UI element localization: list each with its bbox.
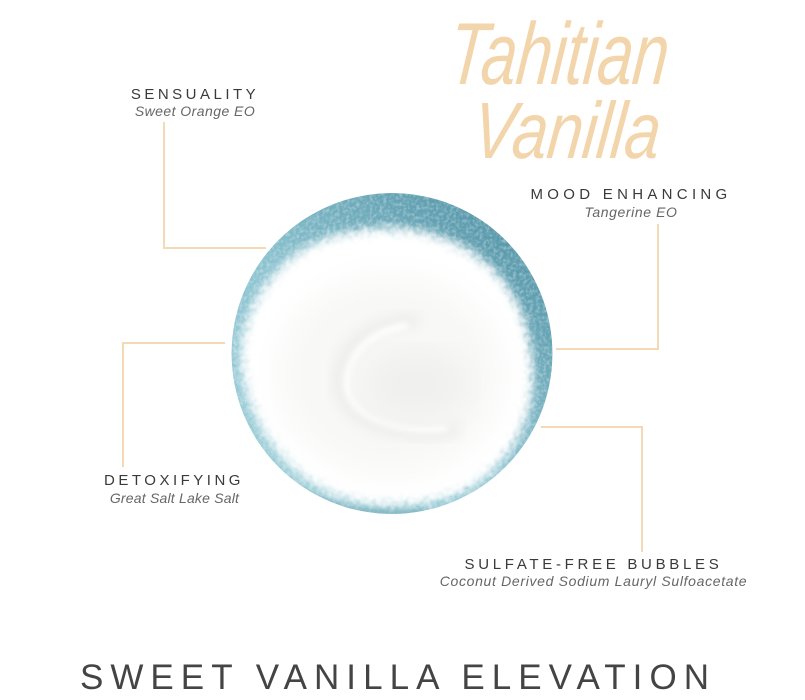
- callout: Mood Enhancing: [530, 186, 732, 350]
- subheading: Great Salt Lake Salt: [110, 490, 239, 506]
- subheading: Tangerine EO: [584, 204, 678, 220]
- leader line: [122, 342, 225, 344]
- leader line: [657, 224, 658, 349]
- heading: SULFATE-FREE BUBBLES: [465, 556, 722, 573]
- heading: DETOXIFYING: [104, 472, 244, 489]
- footer title: SWEET VANILLA ELEVATION: [80, 658, 716, 697]
- callout: Sulfate-Free Bubbles: [440, 426, 747, 589]
- title line: Tahitian: Tahitian: [444, 4, 674, 103]
- bottom rim shadow: [305, 492, 425, 513]
- product image: bath bomb: [232, 193, 552, 514]
- leader line: [541, 426, 642, 428]
- title: Tahitian Vanilla: [444, 4, 674, 175]
- swirl impression: [339, 346, 352, 388]
- blue rim: [232, 193, 552, 514]
- heading: MOOD ENHANCING: [530, 186, 732, 203]
- subheading: Sweet Orange EO: [135, 103, 255, 119]
- subheading: Coconut Derived Sodium Lauryl Sulfoacetate: [440, 573, 747, 589]
- white centre: [238, 225, 534, 508]
- leader line: [163, 122, 164, 248]
- heading: SENSUALITY: [131, 86, 259, 103]
- title line: Vanilla: Vanilla: [469, 86, 666, 175]
- callout: Sensuality: [131, 86, 266, 249]
- callout: Detoxifying: [104, 342, 244, 506]
